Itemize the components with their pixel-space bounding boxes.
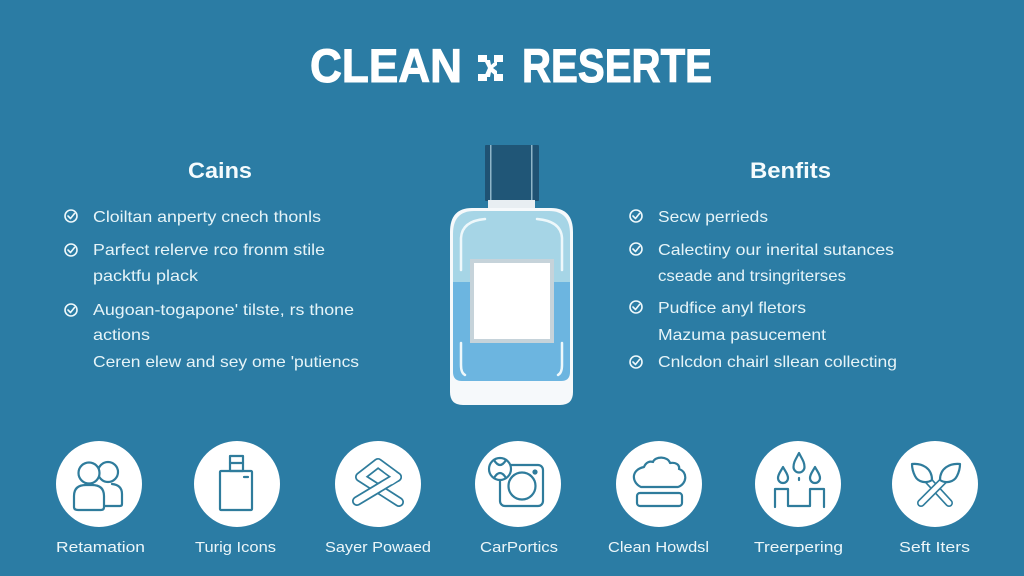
list item 2: packtfu plack: [93, 268, 199, 285]
icon: people: [74, 462, 122, 510]
list item 3: Pudfice anyl fletors: [658, 300, 806, 317]
title: RESERTE: [522, 39, 712, 92]
icon row item: Turig Icons: [194, 441, 280, 556]
icon: droplets and basin: [775, 453, 824, 507]
list item 3: [93, 302, 359, 371]
title: [310, 39, 712, 92]
panel: right list: [630, 158, 897, 371]
title: CLEAN: [310, 39, 462, 92]
list item 3: actions: [93, 327, 150, 344]
check icon 1: [630, 210, 642, 222]
check icon 2: [65, 244, 77, 256]
label: Sayer Powaed: [325, 539, 431, 556]
check icon 3: [65, 304, 77, 316]
list item 3: Mazuma pasucement: [658, 327, 827, 344]
icon row item: CarPortics: [475, 441, 561, 556]
icon: title cross symbol: [478, 55, 503, 81]
list item 2: Parfect relerve rco fronm stile: [93, 242, 325, 259]
list item 1: Secw perrieds: [658, 209, 768, 226]
icon: camera with badge: [489, 458, 543, 506]
icon: crossed spears: [912, 464, 960, 503]
list item 2: Calectiny our inerital sutances: [658, 242, 894, 259]
list item 3: Ceren elew and sey ome 'putiencs: [93, 354, 359, 371]
check icon 3: [630, 301, 642, 313]
check icon 1: [65, 210, 77, 222]
label: Treerpering: [754, 539, 843, 556]
icon row item: Sayer Powaed: [325, 441, 431, 556]
check icon 4: [630, 356, 642, 368]
heading: Cains: Cains: [188, 158, 252, 183]
icon row item: Seft Iters: [892, 441, 978, 556]
list item 3: [658, 300, 827, 344]
label: Clean Howdsl: [608, 539, 709, 556]
list item 4: Cnlcdon chairl sllean collecting: [658, 354, 897, 371]
panel: left list: [65, 158, 359, 371]
heading: Benfits: Benfits: [750, 158, 831, 183]
icon row item: Treerpering: [754, 441, 843, 556]
list item 3: Augoan-togapone' tilste, rs thone: [93, 302, 354, 319]
list item 2: [93, 242, 325, 285]
icon: crossed ribbon diamond: [357, 463, 399, 502]
icon row item: Clean Howdsl: [608, 441, 709, 556]
list item 2: cseade and trsingriterses: [658, 268, 846, 285]
icon row item: Retamation: [56, 441, 145, 556]
label: Retamation: [56, 539, 145, 556]
check icon 2: [630, 243, 642, 255]
bottle illustration: [450, 145, 573, 405]
label: Turig Icons: [195, 539, 276, 556]
label: Seft Iters: [899, 539, 970, 556]
list item 1: Cloiltan anperty cnech thonls: [93, 209, 321, 226]
icon: bottle outline: [220, 456, 252, 510]
label: CarPortics: [480, 539, 558, 556]
list item 2: [658, 242, 894, 285]
icon: cloud on bar: [634, 458, 685, 506]
